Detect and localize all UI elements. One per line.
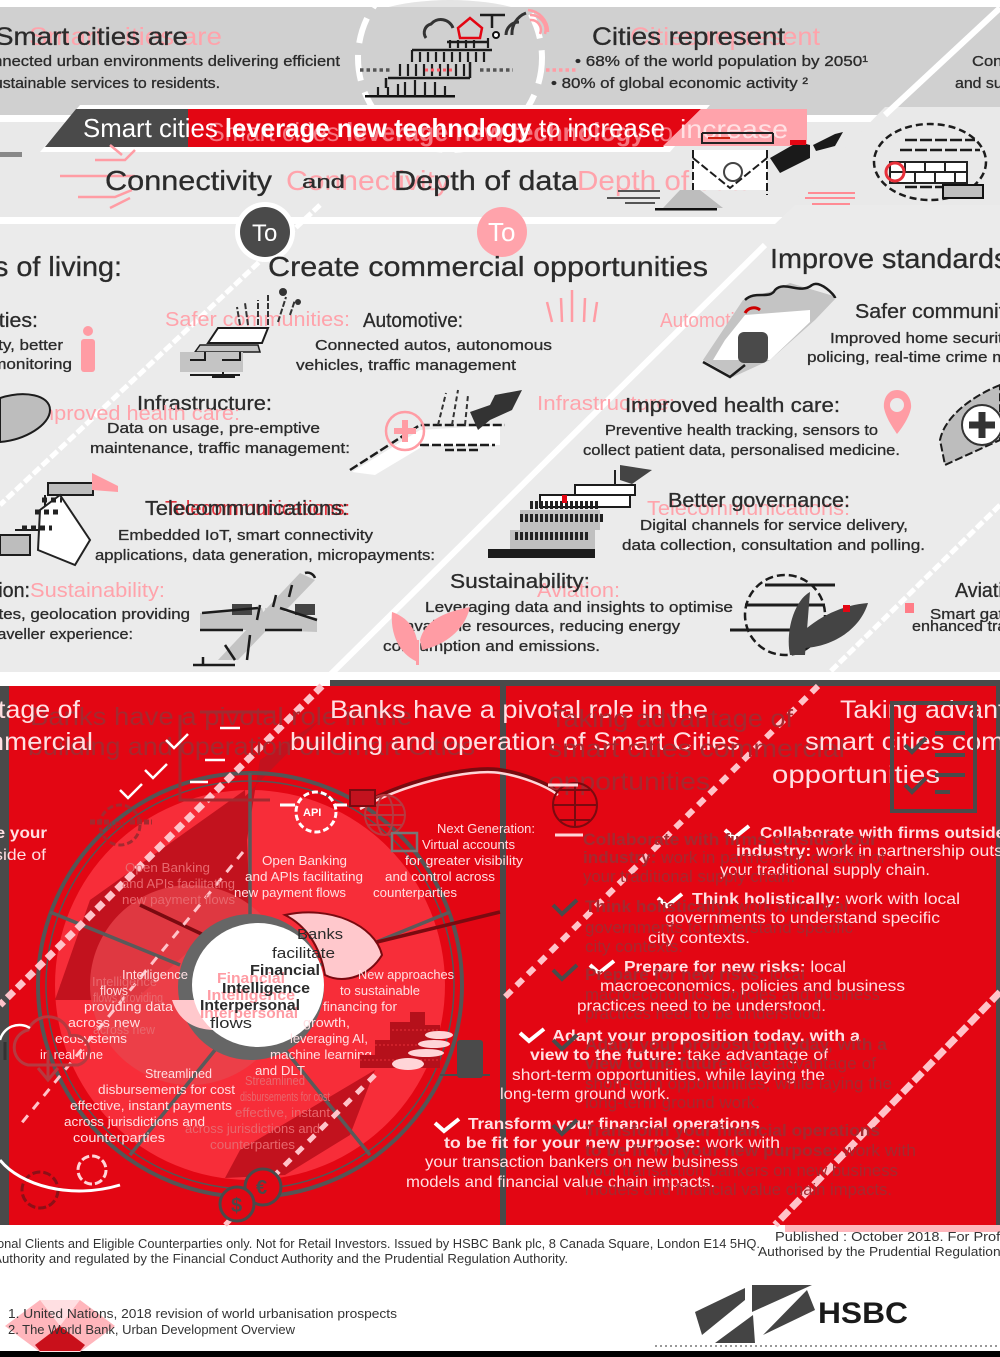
item: transform: Transform your financial operations [468,1116,760,1133]
heading: taking advantage [0,696,1000,796]
heading: improve standards of living [0,243,1000,282]
checklist: ghost layer: practices need to be understood. [585,1005,825,1023]
text block: improved health care: Improved health care: [30,403,240,425]
text block: infrastructure: Infrastructure: [137,393,272,415]
icon: api gears: API [303,807,321,819]
item: adapt: long-term ground work. [500,1086,670,1103]
text block: intelligence flows: across new [93,1022,156,1037]
banner: leverage new technology: Smart cities leverage new technology to [208,117,673,147]
heading: connectivity and depth of data: Depth of data [577,165,755,196]
text block: streamlined disbursements: across jurisdictions and [185,1121,320,1136]
item: prepare: macroeconomics, policies and business [600,978,905,995]
text block: open banking: and APIs facilitating [245,869,363,884]
icon: money swirl [0,1156,120,1208]
icon: hand on device [0,473,118,565]
text block: streamlined disbursements: counterparties [73,1130,166,1145]
text block: cities represent: • 68% of the world population by 2050¹ [575,53,868,70]
text block: new approaches: to sustainable [340,983,420,998]
heading: banks have a pivotal role: building and operation of Smart Cities [290,728,740,756]
text block: automotive: Connected autos, autonomous [315,337,552,354]
icon: globe and leaf [730,575,914,655]
heading: taking advantage: Taking advantage of [550,705,793,733]
icon: smart city building [358,0,578,150]
checklist: ghost layer: your transaction bankers on new business [585,1162,898,1180]
icon: pink pin [884,390,911,434]
icon: hsbc hexagon red [5,1300,115,1352]
icon: currency circles: $ [231,1195,242,1217]
text block: automotive: Automotive: [363,310,463,332]
text block: banks facilitate centre: Banks [297,927,343,943]
text block: aviation: Aviation: [537,580,620,602]
text block: sustainability: Leveraging data and insights to optimise [425,599,733,616]
checklist: ghost layer: Prepare for new risks: local [585,966,805,984]
text block: smart cities are: Smart cities are [29,23,222,51]
footnotes [8,1307,397,1337]
checklist: ghost layer: Collaborate with firms outside your [583,831,878,849]
heading: taking advantage: opportunities [772,761,940,789]
text block: intelligence flows: providing data [84,999,174,1014]
text block: telecommunications [95,498,850,564]
checklist: ghost layer: to be fit for your new purpose: work with [585,1142,916,1160]
text block: infrastructure: maintenance, traffic management: [90,440,350,457]
text block: banks facilitate centre: Interpersonal [200,1006,298,1022]
text block: new approaches: and DLT [255,1063,305,1078]
legal text [0,1230,1000,1266]
text block: aviation [0,580,1000,643]
text block: telecommunications: Telecommunications: [145,498,348,520]
icon: to circle dark: To [252,220,277,247]
icon: ear and cross left [0,385,1000,465]
text block: intelligence flows: ecosystems [55,1031,128,1046]
checklist: white layer [0,825,1000,1191]
checklist: ghost layer: Adapt your proposition today, with a [585,1036,888,1054]
icon: globe right [548,783,597,835]
text block: banks facilitate centre: Interpersonal [200,998,300,1014]
icon: currency circles: € [256,1177,267,1199]
heading: connectivity and depth of data: Connectivity [286,165,450,196]
item: transform: to be fit for your new purpose: work with [444,1135,780,1152]
text block: intelligence flows: flows [100,983,128,998]
icon: road with pin and plus [350,390,522,475]
text block: banks facilitate centre: flows [210,1016,252,1032]
item: think holistically: governments to understand specific [665,910,940,927]
heading: connectivity and depth of data: Depth of data [394,165,578,196]
text block: automotive [296,310,760,374]
checklist: ghost layer: short-term opportunities, while laying the [585,1075,892,1093]
text block: improved health care: collect patient data, personalised medicine. [583,442,900,459]
checklist: ghost layer: models and financial value chain impacts. [585,1181,892,1199]
text block: smart cities are: Smart cities are [0,23,188,51]
text block: new approaches: New approaches [358,967,454,982]
text block: new approaches [255,967,454,1078]
text block: sustainability: Sustainability: [30,580,165,602]
heading: create commercial opportunities: Create commercial opportunities [268,251,708,282]
item: think holistically: city contexts. [648,930,750,947]
text block: new approaches: growth, [303,1015,350,1030]
icon: pink person [81,326,95,372]
heading: connectivity and depth of data: and [302,172,345,192]
item: transform [406,1116,780,1191]
text block: better governance: data collection, consultation and polling. [622,537,925,554]
logo: hsbc [655,1285,1000,1346]
text block: streamlined disbursements: effective, instant payments [70,1098,233,1113]
text block: banks facilitate centre: Financial [250,963,320,979]
text block: smart cities are [0,23,1000,92]
text block: sustainability: consumption and emissions. [383,638,600,655]
text block: open banking: Open Banking [125,860,210,875]
text block: safer communities [0,301,1000,373]
text block: automotive: vehicles, traffic management [296,357,517,374]
text block: improved health care: Preventive health tracking, sensors to [605,422,878,439]
checklist: ghost layer: view to the future: take advantage of [585,1055,876,1073]
checklist: ghost layer: city contexts. [585,938,683,956]
item: collaborate: your traditional supply chain. [720,862,930,879]
item: think holistically: Think holistically: work with local [692,891,960,908]
text block: next generation virtual accounts: Virtual accounts [422,837,515,852]
icon: envelope data [607,132,855,210]
banner: leverage new technology: Smart cities leverage new technology to increase [83,113,665,143]
icon: api gears [90,792,347,845]
item: transform: models and financial value chain impacts. [406,1174,715,1191]
text block: streamlined disbursements: disbursements for cost [240,1089,330,1104]
icon: to circle dark [235,202,295,262]
text block: next generation virtual accounts: and control across [385,869,496,884]
checklist: ghost layer [553,831,916,1199]
text block: new approaches: financing for [323,999,398,1014]
text block: infrastructure [90,393,675,457]
item: prepare: practices need to be understood. [577,998,826,1015]
text block: sustainability: available resources, reducing energy [405,618,681,635]
text block: safer communities: Safer communities: [165,309,350,331]
icon: shield house [703,283,837,377]
icon: currency circles [220,1169,281,1221]
text block: better governance [622,490,925,554]
text block: telecommunications: Telecommunications: [165,498,350,520]
heading: banks have a pivotal role: Banks have a pivotal role in the [30,703,412,731]
text block: cities represent: • 80% of global economic activity ² [551,75,808,92]
text block: new approaches: leveraging AI, [290,1031,368,1046]
checklist: ghost layer: governments to understand specific [585,919,853,937]
checklist: ghost layer: your traditional supply chain. [583,868,795,886]
text block: intelligence flows: Intelligence [122,967,188,982]
text block: streamlined disbursements: Streamlined [145,1066,212,1081]
text block: telecommunications: Telecommunications: [647,498,850,520]
text block: intelligence flows [40,967,188,1062]
icon: connected car [180,288,597,377]
logo: hsbc: HSBC [818,1297,908,1330]
text block: cities represent [551,23,868,92]
text block: infrastructure: Data on usage, pre-emptive [107,420,320,437]
text block: streamlined disbursements: disbursements for cost [98,1082,235,1097]
text block: infrastructure: Infrastructure: [537,393,675,415]
text block: sustainability: Sustainability: [450,571,590,593]
heading: banks have a pivotal role: building and operation of Smart Cities [28,733,475,761]
text block: open banking: new payment flows [122,892,235,907]
text block: improved health care: Improved health care: [625,395,840,417]
item: adapt: Adapt your proposition today, with a [552,1028,860,1045]
text block: banks facilitate centre: Financial [217,971,285,987]
text block: streamlined disbursements [64,1066,330,1152]
checklist: ghost layer: Think holistically: work with local [585,898,848,916]
text block: next generation virtual accounts: counterparties [373,885,457,900]
icon: clipboard dark [892,703,975,811]
item: think holistically [648,891,960,947]
icon: government building [488,465,652,558]
text block: next generation virtual accounts: for greater visibility [405,853,524,868]
icon: clipboard ghost [120,712,275,800]
footnotes: 1. United Nations, 2018 revision of world urbanisation prospects [8,1307,397,1321]
icon: airplane [193,573,317,665]
item: collaborate [0,825,1000,879]
icon: to circle pink [477,207,527,257]
text block: next generation virtual accounts: Next Generation: [437,821,535,836]
text block: new approaches: machine learning [270,1047,372,1062]
heading: connectivity and depth of data [105,165,755,196]
icon: api gears: API [107,820,125,832]
heading: connectivity and depth of data: Connectivity [105,165,272,196]
text block: streamlined disbursements: Streamlined [245,1073,305,1088]
heading: banks have a pivotal role [28,696,740,761]
text block: better governance: Better governance: [668,490,850,512]
item: prepare: Prepare for new risks: local [624,959,846,976]
text block: telecommunications: applications, data generation, micropayments: [95,547,435,564]
icon: pink leaves [392,607,470,665]
icon: globe with bricks [0,124,986,200]
text block: telecommunications: Embedded IoT, smart connectivity [118,527,374,544]
text block: intelligence flows: Intelligence [92,974,157,989]
text block: streamlined disbursements: counterparties [210,1137,296,1152]
text block: open banking [122,853,363,907]
heading: taking advantage: smart cities commercial [548,735,845,763]
text block: intelligence flows: flows providing [93,990,163,1005]
text block: automotive: Automotive: [660,310,760,332]
item: transform: your transaction bankers on new business [425,1154,738,1171]
item: adapt: short-term opportunities, while laying the [512,1067,825,1084]
text block: cities represent: Cities represent [630,23,820,51]
text block: open banking: and APIs facilitating [122,876,235,891]
checklist: ghost layer: Transform your financial operations [585,1122,880,1140]
text block: sustainability [30,571,733,655]
panel: red banks section [0,686,1000,1232]
text block: banks facilitate centre: Intelligence [222,981,310,997]
text block: better governance: Digital channels for service delivery, [640,517,908,534]
item: prepare [577,959,905,1015]
text block: banks facilitate centre: facilitate [272,946,335,962]
item: adapt: view to the future: take advantage of [530,1047,829,1064]
text block: open banking: new payment flows [234,885,346,900]
wheel diagram [38,720,558,1197]
heading: taking advantage: opportunities [548,768,710,796]
icon: coins and buildings [360,1012,490,1078]
banner: leverage new technology [40,105,807,152]
checklist: ghost layer: industry: work in partnership outside of [583,849,885,867]
icon: connectivity circuit [60,145,135,208]
text block: banks facilitate centre: Intelligence [207,988,295,1004]
banner: leverage new technology: increase [680,114,788,144]
text block: streamlined disbursements: effective, instant [235,1105,330,1120]
text block: intelligence flows: in real time [40,1047,103,1062]
checklist: ghost layer: macroeconomics, policies and business [585,986,880,1004]
text block: streamlined disbursements: across jurisdictions and [64,1114,205,1129]
checklist: ghost layer: long-term ground work. [585,1094,760,1112]
text block: next generation virtual accounts [373,821,535,900]
footnotes: 2. The World Bank, Urban Development Overview [8,1323,296,1337]
text block: intelligence flows: across new [68,1015,141,1030]
heading: banks have a pivotal role: Banks have a pivotal role in the [330,696,708,724]
text block: cities represent: Cities represent [592,23,785,51]
item: adapt [500,1028,860,1103]
text block: open banking: Open Banking [262,853,347,868]
text block: banks facilitate centre [200,927,343,1032]
icon: to circle pink: To [488,217,515,247]
icon: globe and monitor [350,790,417,851]
text block: improved health care [30,395,900,459]
icon: cloud arrows [0,1017,89,1080]
